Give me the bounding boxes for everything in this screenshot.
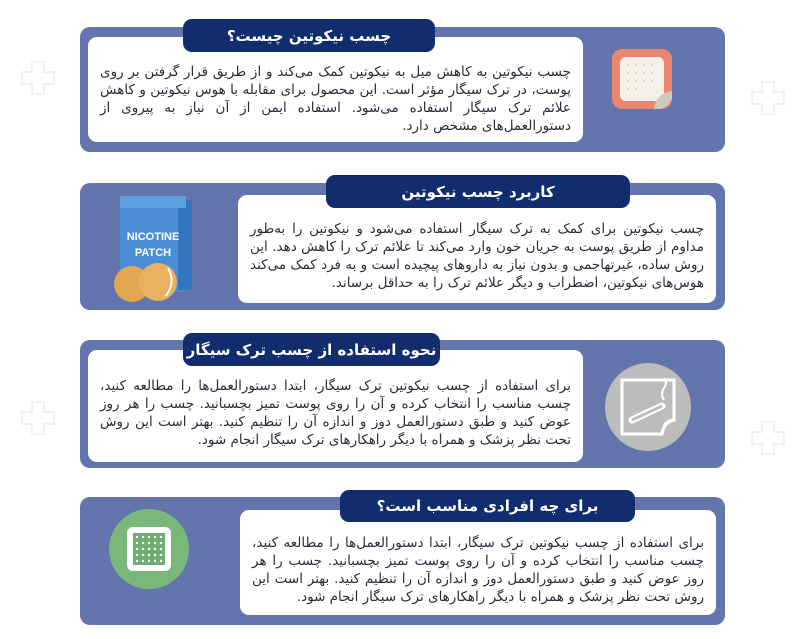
text card 4 (240, 510, 716, 615)
icon: cigarette patch circle (605, 363, 691, 451)
heading 2: کاربرد چسب نیکوتین (401, 182, 555, 200)
heading 3 (183, 333, 440, 366)
heading 4: برای چه افرادی مناسب است؟ (377, 497, 598, 515)
icon: nicotine patch box (114, 196, 192, 302)
icon: nicotine patch box: NICOTINE (127, 231, 179, 243)
text card 2: چسب نیکوتین برای کمک به ترک سیگار استفاده می‌شود و نیکوتین را به‌طور مداوم از طریق پوست به جریان خون وارد می‌کند تا علائم ترک را کاهش دهد. این روش ساده، غیرتهاجمی و بدون نیاز به داروهای پیچیده است و به فرد کمک می‌کند هوس‌های نیکوتین، اضطراب و دیگر علائم ترک را به حداقل برساند. (250, 221, 704, 291)
text card 1: چسب نیکوتین به کاهش میل به نیکوتین کمک می‌کند و از طریق قرار گرفتن بر روی پوست، در ترک سیگار مؤثر است. این محصول برای مقابله با هوس نیکوتین و کاهش علائم ترک سیگار استفاده می‌شود. استفاده ایمن از آن نیاز به پیروی از دستورالعمل‌های مشخص دارد. (100, 64, 571, 134)
text card 2 (238, 195, 716, 303)
panel: how to use (80, 340, 725, 468)
heading 2 (326, 175, 630, 208)
panel: what is nicotine patch (80, 27, 725, 152)
panel: who is it suitable for (80, 497, 725, 625)
heading 3: نحوه استفاده از چسب ترک سیگار (187, 340, 436, 358)
icon: patch (612, 49, 672, 109)
text card 3 (88, 350, 583, 462)
heading 1: چسب نیکوتین چیست؟ (227, 26, 391, 44)
text card 3: برای استفاده از چسب نیکوتین ترک سیگار، ابتدا دستورالعمل‌ها را مطالعه کنید، چسب مناسب را انتخاب کرده و آن را روی پوست تمیز بچسبانید. چسب را هر روز عوض کنید و طبق دستورالعمل دوز و اندازه آن را تنظیم کنید. بهتر است این روش تحت نظر پزشک و همراه با دیگر راهکارهای ترک سیگار انجام شود. (100, 378, 571, 448)
panel: usage (80, 183, 725, 310)
heading 4 (340, 490, 635, 522)
icon: nicotine patch box: PATCH (135, 247, 171, 259)
icon: green patch circle (109, 509, 189, 589)
text card 4: برای استفاده از چسب نیکوتین ترک سیگار، ابتدا دستورالعمل‌ها را مطالعه کنید، چسب مناسب را انتخاب کرده و آن را روی پوست تمیز بچسبانید. چسب را هر روز عوض کنید و طبق دستورالعمل دوز و اندازه آن را تنظیم کنید. بهتر است این روش تحت نظر پزشک و همراه با دیگر راهکارهای ترک سیگار انجام شود. (252, 534, 704, 604)
heading 1 (183, 19, 435, 52)
text card 1 (88, 37, 583, 142)
